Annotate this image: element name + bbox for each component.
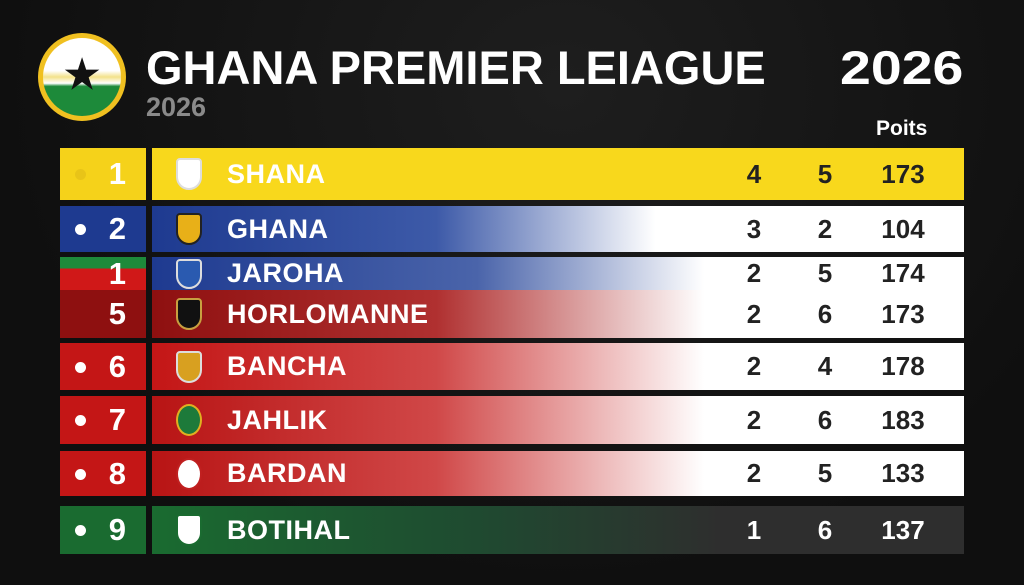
standings table: 174 [881, 258, 925, 288]
standings table: 6 [818, 404, 832, 434]
standings table: 2 [747, 258, 761, 288]
row 6 [60, 343, 964, 390]
year right: 2026 [840, 41, 963, 94]
standings table: SHANA [227, 158, 326, 188]
standings table: 178 [881, 351, 925, 381]
standings table: 6 [818, 298, 832, 328]
subtitle year: 2026 [146, 92, 206, 122]
standings table: BANCHA [227, 351, 347, 381]
row 8 [60, 451, 964, 496]
standings table: 4 [747, 158, 761, 188]
row 2 [60, 206, 964, 252]
standings table: 6 [109, 348, 126, 384]
standings table: BOTIHAL [227, 514, 350, 544]
standings table: 2 [109, 211, 126, 246]
standings table: 9 [109, 512, 126, 547]
title: GHANA PREMIER LEIAGUE [146, 41, 766, 94]
column header: Poits [876, 117, 927, 140]
standings table: 104 [881, 214, 925, 244]
standings table: 5 [818, 458, 832, 488]
standings table: GHANA [227, 214, 328, 244]
standings table: 1 [109, 156, 126, 191]
standings table: HORLOMANNE [227, 298, 428, 328]
row 1 [60, 148, 964, 200]
standings table: 133 [881, 458, 925, 488]
standings table: 3 [747, 214, 761, 244]
standings table: BARDAN [227, 458, 347, 488]
standings table: 8 [109, 456, 126, 490]
standings table: 2 [747, 351, 761, 381]
standings table: 137 [881, 514, 925, 544]
standings table: 1 [109, 256, 126, 290]
standings table: 173 [881, 298, 925, 328]
row 7 [60, 396, 964, 444]
logo: ★ [64, 53, 100, 97]
standings table: 173 [881, 158, 925, 188]
standings table: JAROHA [227, 258, 344, 288]
standings table: 6 [818, 514, 832, 544]
standings table: 183 [881, 404, 925, 434]
row 3/5 [60, 256, 964, 338]
standings table: JAHLIK [227, 404, 328, 434]
standings table: 2 [747, 404, 761, 434]
standings table: 7 [109, 402, 126, 437]
standings table: 4 [818, 351, 832, 381]
standings table: 5 [818, 158, 832, 188]
standings table: 2 [747, 458, 761, 488]
logo [38, 33, 126, 121]
standings table: 5 [109, 296, 126, 331]
standings table: 1 [747, 514, 761, 544]
standings table: 5 [818, 258, 832, 288]
standings table: 2 [818, 214, 832, 244]
row 9 [60, 506, 964, 554]
standings table: 2 [747, 298, 761, 328]
